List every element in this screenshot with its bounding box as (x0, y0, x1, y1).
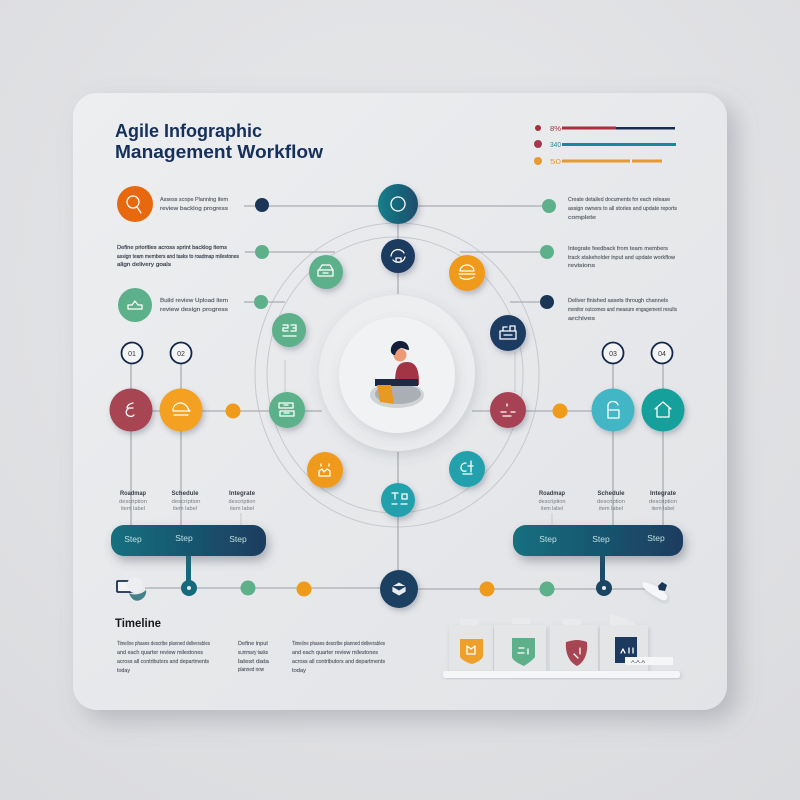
box: red badge (550, 619, 598, 671)
right row 1: node and text: complete (568, 215, 596, 221)
right row 3: node and text: monitor outcomes and measure engagement results (568, 307, 677, 313)
right row 2: node and text: Integrate feedback from team members (568, 246, 668, 252)
center disc with person (319, 295, 475, 451)
left step labels: description (172, 499, 201, 505)
left process: numbered rings and big circles (110, 342, 202, 432)
right step labels: item label (652, 506, 674, 512)
node: orange right connector (552, 404, 568, 418)
legend: progress bars: 8% (550, 126, 561, 133)
left row 1: search icon and text (117, 186, 228, 222)
timeline text block 3: Timeline phases describe planned deliverables (292, 641, 385, 647)
left row 1: search icon and text: Assess scope Planning item (160, 197, 228, 203)
left step bar: Step (175, 533, 193, 543)
right step labels (538, 491, 677, 512)
timeline text block 3: across all contributors and departments (292, 659, 385, 665)
right row 2: node and text (540, 245, 676, 269)
right step labels: item label (541, 506, 563, 512)
node: navy row 1 (255, 198, 269, 212)
right row 2: node and text: revisions (568, 263, 595, 269)
timeline text block 1: and each quarter review milestones (117, 650, 203, 656)
right row 1: node and text (542, 197, 677, 221)
rings and connectors (131, 206, 663, 589)
left step bar (111, 525, 266, 584)
left step bar: Step (229, 534, 247, 544)
title: Agile Infographic (115, 120, 262, 141)
right row 2: node and text: track stakeholder input and update workflow (568, 255, 676, 261)
left row 1: search icon and text: review backlog progress (160, 206, 228, 212)
timeline text block 2: summary tasks (238, 650, 268, 656)
timeline text block 3: today (292, 668, 306, 674)
node: orange left connector (226, 404, 240, 418)
left step labels: item label (121, 506, 145, 512)
left row 3: cloud icon and text: Build review Upload item (160, 298, 228, 304)
right row 1: node and text: assign owners to all stories and update reports (568, 206, 677, 212)
node: teal bottom (381, 483, 415, 517)
right step labels: description (597, 499, 625, 505)
title (115, 120, 324, 162)
right process: numbered rings and big circles: 04 (658, 351, 666, 358)
right step bar: Step (647, 533, 665, 543)
panel: main card (73, 93, 727, 710)
left row 3: cloud icon and text: review design progress (160, 307, 228, 313)
timeline text block 2: latest data (238, 659, 270, 665)
timeline text block 2: planned now (238, 667, 265, 673)
left row 2: text (117, 245, 239, 268)
left step labels: item label (230, 506, 254, 512)
left row 2: text: assign team members and tasks to roadmap milestones (117, 254, 239, 260)
right step bar: Step (539, 534, 557, 544)
timeline text block 3: and each quarter review milestones (292, 650, 378, 656)
right step bar (513, 525, 683, 584)
right row 1: node and text: Create detailed documents for each release (568, 197, 670, 203)
left step labels: Integrate (229, 491, 256, 497)
right process: numbered rings and big circles (592, 342, 684, 432)
left process: numbered rings and big circles: 02 (177, 351, 185, 358)
left step bar: Step (124, 534, 142, 544)
right step labels: Roadmap (539, 491, 565, 497)
node: green upper left (309, 255, 343, 289)
timeline text block 1 (117, 641, 210, 674)
left step labels: Schedule (172, 491, 199, 497)
node: green lower left (269, 392, 305, 428)
left row 3: cloud icon and text (118, 288, 228, 322)
title: Management Workflow (115, 141, 324, 162)
left process: numbered rings and big circles: 01 (128, 351, 136, 358)
icon: laptop device (117, 577, 146, 601)
note card (625, 657, 673, 665)
shelf board (443, 671, 680, 678)
left row 2: text: align delivery goals (117, 262, 171, 268)
icon: mouse device (642, 582, 667, 601)
timeline heading: Timeline (115, 616, 161, 630)
timeline text block 3 (292, 641, 385, 674)
right process: numbered rings and big circles: 03 (609, 351, 617, 358)
node: navy timeline center with box icon (380, 570, 418, 608)
legend: progress bars (534, 125, 676, 166)
node: green row 2 (255, 245, 269, 259)
shelf with document boxes (443, 614, 680, 678)
right step labels: description (649, 499, 677, 505)
timeline text block 1: Timeline phases describe planned deliverables (117, 641, 210, 647)
right step labels: description (538, 499, 566, 505)
right row 3: node and text: Deliver finished assets through channels (568, 298, 668, 304)
box: orange badge (449, 619, 493, 671)
left step labels: item label (173, 506, 197, 512)
right step labels: item label (599, 506, 623, 512)
legend: progress bars: 340 (550, 142, 561, 149)
box: green badge (494, 618, 546, 671)
timeline nodes (181, 580, 612, 596)
note card: A.A.A (631, 659, 645, 664)
right step bar: Step (592, 534, 610, 544)
right step labels: Integrate (650, 491, 677, 497)
node: orange upper right (449, 255, 485, 291)
node: red lower right (490, 392, 526, 428)
left step labels: Roadmap (120, 491, 146, 497)
legend: progress bars: 50 (550, 159, 561, 166)
left step labels: description (119, 499, 147, 505)
right step labels: Schedule (598, 491, 625, 497)
timeline text block 2 (238, 641, 270, 673)
timeline text block 1: across all contributors and departments (117, 659, 209, 665)
node: orange bottom left (307, 452, 343, 488)
node: teal bottom right (449, 451, 485, 487)
node: navy right (490, 315, 526, 351)
node: green row 3 (254, 295, 268, 309)
box: navy badge (600, 614, 648, 671)
left step labels (119, 491, 256, 512)
node: top teal with ring icon (378, 184, 418, 224)
timeline text block 1: today (117, 668, 130, 674)
left step labels: description (228, 499, 256, 505)
right row 3: node and text: archives (568, 316, 595, 322)
node: green left (272, 313, 306, 347)
left row 2: text: Define priorities across sprint backlog items (117, 245, 227, 251)
node: navy top (381, 239, 415, 273)
right row 3: node and text (540, 295, 677, 322)
timeline text block 2: Define input (238, 641, 268, 647)
person at desk (370, 341, 424, 408)
